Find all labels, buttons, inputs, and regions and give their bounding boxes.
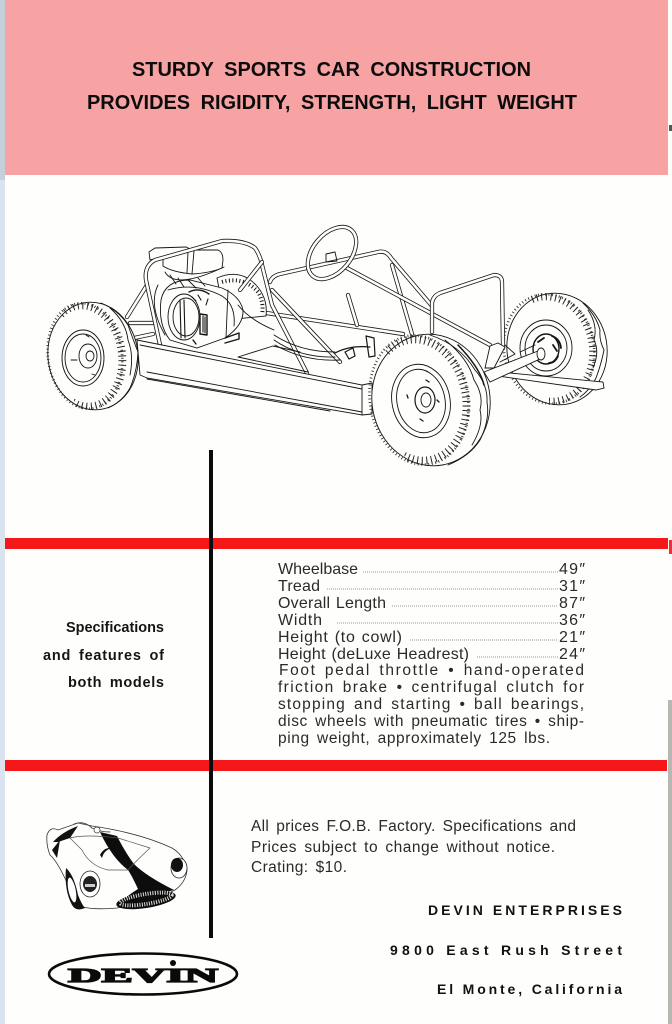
spec table: 49″ <box>559 561 585 578</box>
features paragraph: stopping and starting • ball bearings, <box>278 696 584 713</box>
title: PROVIDES RIGIDITY, STRENGTH, LIGHT WEIGHT <box>87 92 577 114</box>
address <box>390 902 622 997</box>
spec table: Wheelbase <box>278 561 358 578</box>
engine <box>149 247 274 348</box>
left rear wheel <box>46 302 139 410</box>
spec table: Height (to cowl) <box>278 629 402 646</box>
spec table: 21″ <box>559 629 585 646</box>
chassis box <box>137 335 375 415</box>
illustration: go-kart chassis line drawing <box>41 218 616 475</box>
fuel tank <box>163 250 223 274</box>
title <box>87 59 577 114</box>
spec table: Height (deLuxe Headrest) <box>278 646 469 663</box>
red rule upper <box>5 538 668 549</box>
steering wheel <box>298 218 366 288</box>
pricing note: Crating: $10. <box>251 859 347 876</box>
side label: specifications: and features of <box>43 648 164 664</box>
far rear wheel <box>502 292 608 406</box>
front right wheel <box>368 334 491 466</box>
tubular frame <box>127 252 503 362</box>
pricing note: All prices F.O.B. Factory. Specifications and <box>251 818 576 835</box>
far tyre behind engine <box>217 274 266 320</box>
logo: Devin oval: DEVIN <box>68 965 219 987</box>
address: 9800 East Rush Street <box>390 942 622 958</box>
red rule lower <box>5 760 667 771</box>
side label: specifications <box>43 620 164 691</box>
icon: sports car <box>47 823 187 913</box>
features paragraph: friction brake • centrifugal clutch for <box>278 679 584 696</box>
address: El Monte, California <box>437 981 622 997</box>
logo: Devin oval <box>49 954 237 994</box>
side label: specifications: both models <box>68 675 164 691</box>
rear axle <box>484 343 604 390</box>
features paragraph: Foot pedal throttle • hand-operated <box>279 662 584 679</box>
spec table: 87″ <box>559 595 585 612</box>
spec table <box>278 561 585 663</box>
spec table: Width <box>278 612 322 629</box>
spec table: 24″ <box>559 646 585 663</box>
spec table: Tread <box>278 578 320 595</box>
spec table: 36″ <box>559 612 585 629</box>
pricing note <box>251 818 576 876</box>
header band <box>5 0 668 175</box>
engine housing <box>160 280 243 348</box>
pricing note: Prices subject to change without notice. <box>251 839 555 856</box>
features paragraph: disc wheels with pneumatic tires • ship- <box>278 713 584 730</box>
spec table: 31″ <box>559 578 585 595</box>
engine roll hoop <box>146 241 307 373</box>
features paragraph <box>278 662 584 747</box>
features paragraph: ping weight, approximately 125 lbs. <box>278 730 550 747</box>
spec table: Overall Length <box>278 595 386 612</box>
side label: specifications: Specifications <box>66 620 164 636</box>
black vertical rule <box>209 450 213 938</box>
address: DEVIN ENTERPRISES <box>428 902 622 918</box>
title: STURDY SPORTS CAR CONSTRUCTION <box>132 59 531 81</box>
